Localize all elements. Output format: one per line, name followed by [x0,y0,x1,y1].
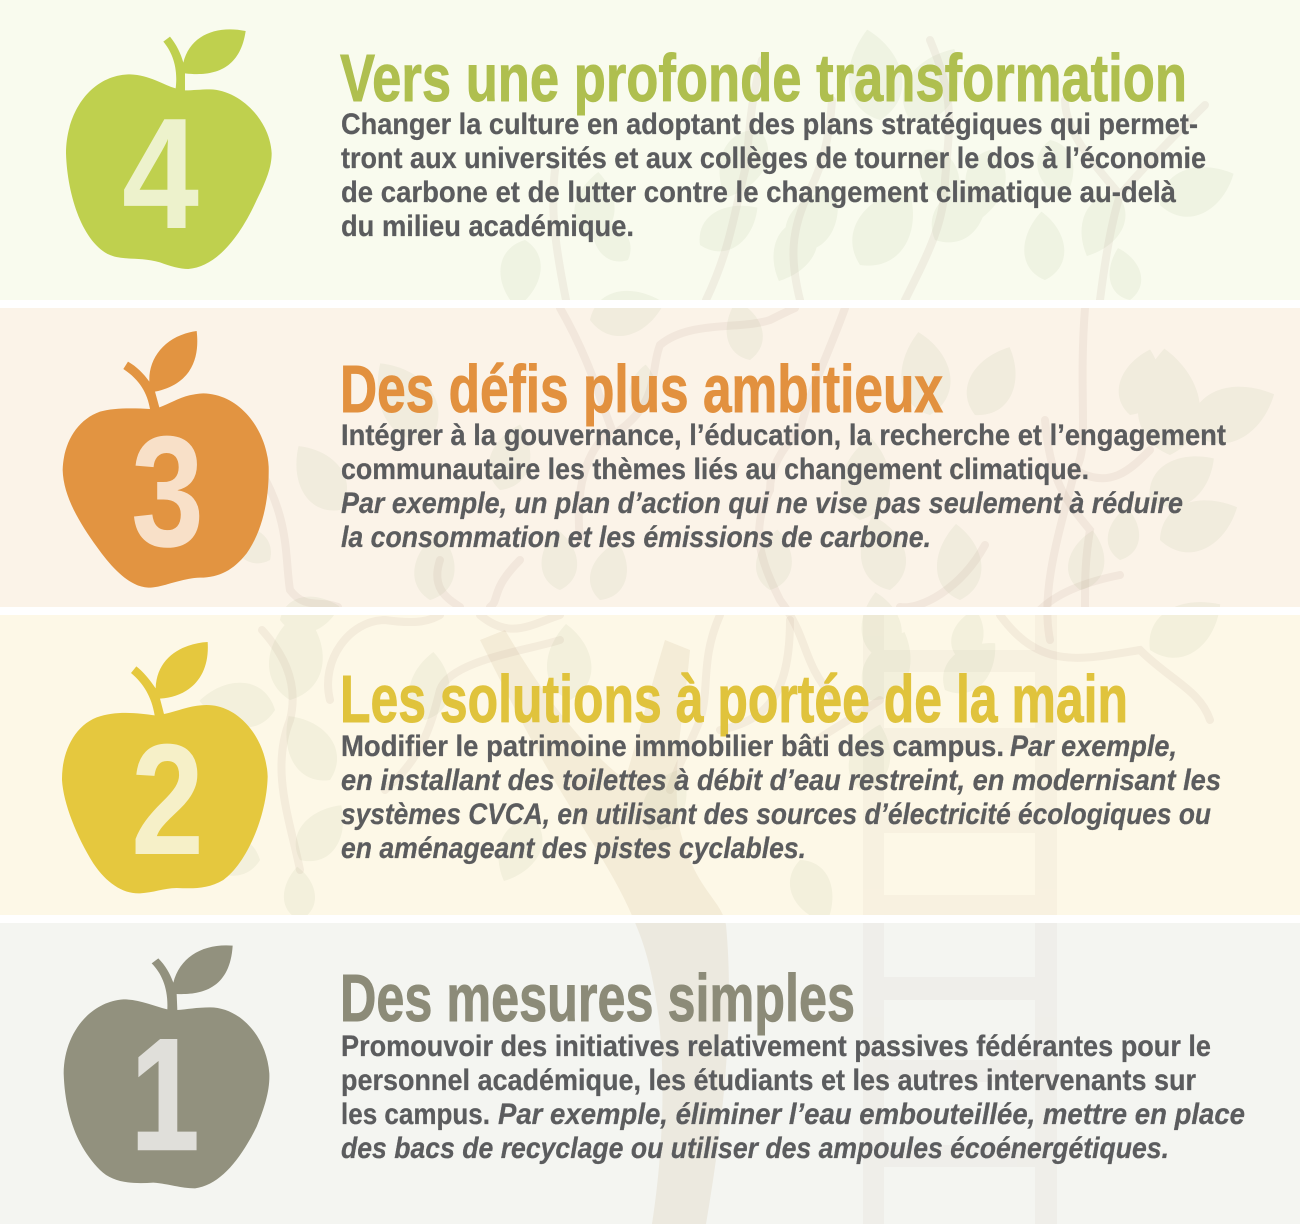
panel background: step 2 [0,615,1300,915]
text block: step 1 [341,1030,1245,1165]
text block: step 2 [341,730,1221,865]
text block: step 3: Par exemple, un plan d’action qui ne vise pas seulement à réduire [341,487,1183,520]
text block: step 3 [341,419,1226,554]
text block: step 2: Modifier le patrimoine immobilier bâti des campus. [341,730,1004,763]
panel: step 2 [62,642,1221,893]
panel: step 1 [64,945,1245,1188]
icon: yellow apple with number 2 [62,642,268,893]
text block: step 3: Intégrer à la gouvernance, l’éducation, la recherche et l’engagement [341,419,1226,452]
panel background: step 1 [0,923,1300,1224]
icon: orange apple with number 3: 3 [131,404,204,580]
heading: step 3: Des défis plus ambitieux [340,352,943,427]
text block: step 4: tront aux universités et aux collèges de tourner le dos à l’économie [341,142,1206,175]
icon: grey apple with number 1 [64,945,269,1188]
text block: step 2: en installant des toilettes à débit d’eau restreint, en modernisant les [341,764,1221,797]
text block: step 1: Par exemple, éliminer l’eau embouteillée, mettre en place [498,1098,1245,1131]
text block: step 3: la consommation et les émissions de carbone. [341,521,931,554]
text block: step 2: Par exemple, [1010,730,1177,763]
ladder [863,615,1057,1224]
icon: green apple with number 4: 4 [122,86,199,262]
text block: step 1: personnel académique, les étudiants et les autres intervenants sur [341,1064,1196,1097]
text block: step 4: de carbone et de lutter contre le changement climatique au-delà [341,176,1176,209]
icon: grey apple with number 1: 1 [131,1007,199,1183]
tree branches [260,40,1210,870]
text block: step 2: en aménageant des pistes cyclables. [341,832,806,865]
icon: orange apple with number 3 [63,331,269,588]
panel background: step 3 [0,308,1300,607]
text block: step 3: communautaire les thèmes liés au changement climatique. [341,453,1089,486]
text block: step 1: les campus. [341,1098,490,1131]
text block: step 4: Changer la culture en adoptant des plans stratégiques qui permet- [341,108,1198,141]
panel: step 4 [66,29,1206,269]
icon: yellow apple with number 2: 2 [131,712,204,888]
heading: step 1: Des mesures simples [340,961,855,1036]
text block: step 1: Promouvoir des initiatives relativement passives fédérantes pour le [341,1030,1211,1063]
panel background: step 4 [0,0,1300,300]
text block: step 4: du milieu académique. [341,210,634,243]
tree leaves [189,27,1284,931]
icon: green apple with number 4 [66,29,272,269]
tree trunk [480,630,729,1224]
text block: step 4 [341,108,1206,243]
text block: step 1: des bacs de recyclage ou utiliser des ampoules écoénergétiques. [341,1132,1169,1165]
panel: step 3 [63,331,1226,588]
